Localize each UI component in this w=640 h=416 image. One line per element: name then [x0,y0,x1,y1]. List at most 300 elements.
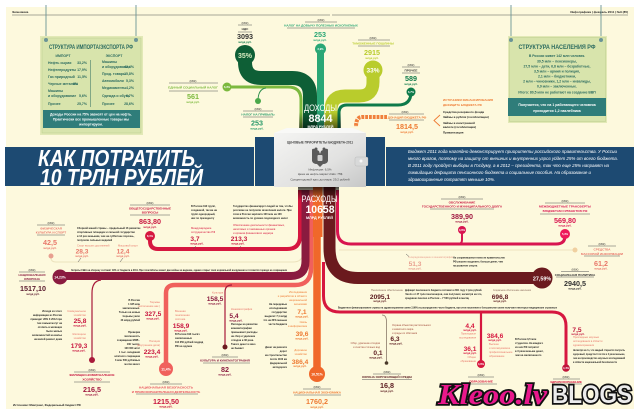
security notes: 1 тыс. заседания [119,351,141,354]
label: culture and cinema: (КБК) [222,353,229,357]
healthcare notes [571,327,625,364]
economy notes: на строительство [265,354,287,357]
label: mineral extraction tax: НАЛОГ НА ДОБЫЧУ ПОЛЕЗНЫХ ИСКОПАЕМЫХ [284,24,359,28]
label: national economy: млрд руб. [310,405,324,409]
revenue total: 8844 [308,113,333,125]
sport sub-items: 28,3 [76,248,89,256]
security notes: пенсионная [175,314,190,317]
education notes: образование [460,359,477,363]
label: unified social tax: ЕДИНЫЙ СОЦИАЛЬНЫЙ НАЛОГ [168,86,218,90]
revenue circles: 2,9% [318,47,324,51]
import list: 17,9% [77,68,88,72]
housing sector notes: млрд руб. [73,324,87,328]
environment notes: 0,1 [373,350,383,357]
label: physical culture and sport: КУЛЬТУРА И СПОРТ [36,230,66,234]
icon: orange chevron [434,115,440,126]
environment notes: и очистка сточных вод [353,346,380,349]
culture notes: млрд руб. [229,318,243,322]
label: physical culture and sport: (КБК) [48,221,55,225]
environment notes: млрд руб. [389,342,403,346]
label: environmental protection: млрд руб. [380,389,394,393]
population text: 0,9 млн – заключенные. [537,84,577,88]
label: housing and utilities: ЖИЛИЩНО-КОММУНАЛЬНОЕ [68,373,115,377]
label: VAT: 3093 [237,32,253,41]
economy notes: На передовые [269,303,288,306]
culture notes: на сбор и удаление [231,335,256,338]
education notes: В России 3,5 млн [515,338,537,341]
note: financial bodies: этом в России зарплата 100 млн на 100 [233,213,282,216]
education notes: из них РФ потратит [515,346,540,349]
watermark: Kleoo.lv [437,379,548,411]
deficit financing sources: ДЕФИЦИТА БЮДЖЕТА РФ [443,103,482,107]
icon: two-headed eagle [312,148,328,167]
culture notes: отходов в 36 раза. [231,339,254,342]
security notes: 116 350 рублей подряд [175,341,204,344]
export list: и оборудование [102,65,130,69]
note: financial bodies: млрд руб. [231,242,245,246]
culture notes: не бывает [231,347,245,350]
label: customs duties: 2915 [364,48,380,57]
export list: Медикаменты [102,86,126,90]
security notes: 130 тысяч, [127,343,140,346]
note: general issues: них по президенту [191,217,215,220]
education notes: 36,1 [464,346,477,353]
culture notes: 5,4 [229,313,239,320]
export list: 4,2% [126,86,135,90]
healthcare notes: в области национальной безопасности [573,361,617,364]
import list: 33,2% [77,61,88,65]
economy notes: Связь [300,320,308,324]
header [12,10,628,15]
label: other revenue: млрд руб. [404,82,418,86]
social sub-items: среднюю пенсию в России – 7 500 рублей в месяц [405,297,469,300]
watermark [437,379,632,411]
sport sub-items: млрд руб. [116,254,130,258]
deficit financing sources: ИСТОЧНИКИ ФИНАНСИРОВАНИЯ [443,98,493,102]
security notes: млрд руб. [174,328,188,332]
note: financial bodies [231,205,293,249]
security notes: 223,4 [144,349,161,356]
healthcare notes: млрд руб. [571,332,585,336]
label: budget donations: млрд руб. [400,130,414,134]
label: national security: млрд руб. [159,404,173,408]
note: healthcare budget: Бюджетное финансирование страны на здравоохранение занял 2,98% из распределено части бюджета, при этом население в большинстве своем получают некоторые медицинские страховые [338,306,558,310]
environment notes: и животного мира [392,328,414,331]
note: sport: спортивных площадок и сильной государство [77,231,136,234]
export list: Прочее [102,102,115,106]
sources credit: Источники: Минтранс, Федеральный бюджет РФ [13,403,81,407]
social sub-items: 2095,1 [370,294,390,301]
label: national defence: ОБОРОНА [24,277,41,281]
expense circles: 5,3% [562,232,569,236]
housing sector notes: Исходя из этого [42,310,62,313]
culture notes: Такого денег и кино [231,343,256,346]
note: sport: Сборной нашей страны – предельный 16 развитие [77,227,141,230]
label: interbudget transfers: МЕЖБЮДЖЕТНЫЕ ТРАНСФЕРТЫ [539,204,591,208]
culture notes [207,290,258,350]
healthcare notes: здоровый, предстоит почти в 2 раза меньше, [573,353,625,356]
label: national security: 1215,50 [153,397,179,406]
deficit financing sources: валюте (гособлигации) [443,125,476,129]
economy notes: автодороги [273,366,287,369]
environment notes [351,323,431,360]
label: national economy: (КБК) [314,385,321,389]
revenue total: МЛРД РУБЛЕЙ [308,124,334,129]
education notes: млрд руб. [463,351,477,355]
security notes: В России [129,299,140,302]
TV and radio item: РФ решило выделить больше денег, чем [453,260,503,264]
expense total: 10658 [306,204,334,216]
label: debt servicing: ГОСУДАРСТВЕННОГО И МУНИЦИПАЛЬНОГО ДОЛГА [422,204,503,208]
social sub-items: млрд руб. [493,299,507,303]
housing sector notes: было жилых [46,330,63,333]
sport sub-items: Массовый спорт [118,244,139,248]
expense total [302,194,338,220]
label: national security: (КБК) [163,380,170,384]
label: mass media: 61,2 [594,259,608,268]
expense circles: 3,6% [478,362,485,366]
security notes: заключенных [175,337,193,340]
label: mineral extraction tax: млрд руб. [313,38,327,42]
label: education [468,373,497,384]
label: housing and utilities: ХОЗЯЙСТВО [82,378,102,382]
note: sport [77,227,141,242]
label: culture and cinema: 82 [221,365,229,374]
economy notes: и информатика [288,324,307,328]
note: financial bodies: возможность по уровню подоходного налог [233,217,288,220]
label: social policy: млрд руб. [568,286,582,290]
label: debt servicing: млрд руб. [455,220,469,224]
security notes: (исполнение нак.) [138,304,160,308]
label: healthcare: ЗДРАВООХРАНЕНИЕ [550,380,582,384]
panel: import/export structure: СТРУКТУРА ИМПОРТА/ЭКСПОРТА РФ [49,44,134,51]
label: mineral extraction tax: 253 [314,30,326,39]
social sub-items: Социальное обеспечение населения [493,289,532,292]
TV and radio item: млрд руб. [408,266,422,270]
economy notes: 39,6 [296,331,309,338]
housing sector notes: приводит 28% Х 2012 при [30,318,62,321]
note: general issues: сотрудничество РФ [191,230,215,234]
label: debt servicing: (КБК) [459,195,466,199]
panel: import/export structure: ИМПОРТ [55,54,71,58]
education notes: исследования [459,336,477,340]
label: customs duties [352,36,394,60]
economy notes: части бюджета [268,323,288,326]
economy notes: Дорожное [294,348,308,352]
housing sector notes: тем самым могут на [37,322,63,325]
sport sub-items: 12,4 [117,248,130,256]
callout: oil dependence: импортируем. [79,122,103,126]
education notes: образование [489,354,505,358]
economy notes: хозяйство [295,352,308,356]
label: education: ОБРАЗОВАНИЕ [469,380,493,384]
deficit financing sources: Займы в иностранной [443,121,475,125]
economy notes: государство [272,311,287,314]
label: environmental protection: (КБК) [384,370,391,374]
revenue circles [222,44,416,104]
intro text: В 2011 году пройдут выборы в Госдуму, а в 2012 – президента, так что еще 25% направят на [408,162,609,168]
expense circles: 14,23% [54,276,66,280]
import list: Газ природный [48,75,75,79]
security notes: (внутренние дела) [137,343,160,347]
expense total: МЛРД РУБЛЕЙ [306,215,333,220]
label: budget donations [388,110,427,134]
security notes: 43 млрд рублей [120,319,140,322]
TV and radio item: на развитие спорта [453,264,478,268]
label: interbudget transfers [539,199,591,228]
label: national security: И ПРАВООХРАНИТЕЛЬНАЯ ДЕЯТЕЛЬНОСТЬ [132,390,201,394]
economy notes: что на 30% меньше [263,319,288,322]
import list: Нефтепродукты [48,68,76,72]
label: general state issues: 863,80 [139,217,161,226]
wallet: Цена на нефть марки Urals: 75$ [298,172,343,176]
label: general state issues: ОБЩЕГОСУДАРСТВЕННЫЕ [129,206,171,210]
healthcare notes: чем на производство научных исследований [573,357,625,360]
import list: и оборудование [48,94,76,98]
security notes: 327,5 [145,311,162,318]
panel: import/export structure: ЭКСПОРТ [106,54,123,58]
economy notes: Денег на ремонте [265,346,288,349]
label: other revenue [402,63,420,86]
wallet: Инфляция: 6,5% [308,168,332,172]
callout: oil dependence: Доходы России на 75% зависят от цен на нефть. [50,112,132,116]
sport sub-items: Спорт высших достижений [77,244,110,248]
label: debt servicing [422,195,503,224]
label: VAT: НДС [242,27,249,31]
label: debt servicing: 389,90 [451,212,473,221]
label: national security: НАЦИОНАЛЬНАЯ БЕЗОПАСНОСТЬ [139,386,194,390]
export list: Прод. товары [102,72,126,76]
environment notes: Сбор, удаление отходов [351,341,381,345]
label: national security [132,380,201,408]
security notes: заключенных. [122,307,140,310]
economy notes [263,290,309,369]
security notes: Полиция [149,339,161,343]
expense circles: 11,4% [161,368,171,372]
label: housing and utilities: млрд руб. [85,392,99,396]
economy notes: и разработки в области [278,294,307,298]
label: other revenue: ПРОЧЕЕ [405,68,417,72]
social sub-items: млрд руб. [373,299,387,303]
label: VAT: (КБК) [242,21,249,25]
label: culture and cinema: млрд руб. [218,372,232,376]
environment notes: и среды их обитания [392,331,418,335]
education notes: млрд руб. [463,328,477,332]
label: mass media: СРЕДСТВА [594,248,611,252]
note: financial bodies: 213,3 [231,236,248,243]
export list [102,60,135,106]
label: budget donations: ДОНАЦИЯ БЮДЖЕТА РФ [388,116,427,120]
note: general issues: созданной, так же на [191,209,217,212]
note: general issues: млрд руб. [190,242,204,246]
environment notes: Охрана объектов растительного [392,323,431,327]
population text: В России живет 142 млн человек. [529,54,585,58]
education notes: Общее [468,355,477,359]
label: profit tax: (КБК) [255,107,262,111]
social sub-items: Число от 27 трлн пенсионеров, они получают, несмотря на это, [405,293,482,296]
banner band [5,137,634,186]
culture notes: превышают расходы [231,331,257,334]
security notes: 100 000 штат [124,347,141,350]
healthcare notes: Прикладные научные [573,335,600,339]
security notes: В России 193 тысяч [175,333,200,336]
label: culture and cinema: КУЛЬТУРА И КИНЕМАТОГРАФИЯ [200,358,251,362]
housing sector notes: отопить в жилищах [38,326,63,329]
watermark: BLOGS [552,381,632,409]
revenue circles: 33% [366,68,380,74]
label: national defence: млрд руб. [26,292,40,296]
culture notes: Культура [212,290,224,294]
note: general issues: Международное [191,226,212,230]
housing sector notes: возможностей на жилье [32,334,63,337]
security notes: сокращение МОБ - [117,339,140,342]
economy notes: млрд руб. [295,336,309,340]
security notes: 1 325 млн [128,303,140,306]
callout: dependants: Получается, что на 1 работающего человека [518,103,596,107]
expense circles: 8,1% [147,234,154,238]
education notes: студентов. На каждого [515,342,544,345]
label: profit tax: НАЛОГ НА ПРИБЫЛЬ [241,112,275,116]
culture notes: Кинематография [231,307,253,311]
label: budget donations: 1814,5 [396,122,418,131]
label: general state issues: млрд руб. [143,225,157,229]
header: Инфографика | февраль 2011 | №9 (85) [570,10,628,14]
note: general issues: 3,7 [190,236,200,243]
export list: Автомобили [102,79,124,83]
label: other revenue: (КБК) [408,63,415,67]
housing sector notes: 25,8 [74,318,87,325]
label: interbudget transfers: 569,80 [554,216,576,225]
label: social policy [555,268,596,290]
population text: 27,5 млн – дети, 6,8 млн – безработные, [524,64,591,68]
note: financial bodies: Государство финансирует людей за том, чтобы [233,205,293,208]
label: environmental protection: 16,8 [380,381,394,390]
label: general state issues [129,201,171,229]
housing sector notes: млрд руб. [72,348,86,352]
label: national defence: НАЦИОНАЛЬНАЯ [19,273,46,277]
label: housing and utilities: (КБК) [89,368,96,372]
environment notes: 6,3 [390,336,400,343]
label: physical culture and sport: ФИЗИЧЕСКАЯ [40,226,63,230]
label: mineral extraction tax: (КБК) [318,18,325,22]
label: national defence [19,268,46,296]
housing sector notes: 179,3 [71,343,88,350]
security notes: млрд руб. [146,316,160,320]
label: unified social tax: 561 [187,92,199,101]
callout: oil dependence: Практически все промышленные товары мы [53,118,129,122]
culture notes: Расходы на развитие [231,323,258,326]
import list [48,61,88,106]
note: financial bodies: и органов финансового надзора [233,231,274,235]
education notes: млрд руб. [488,338,502,342]
security notes: Проверка [128,331,141,334]
export list: Машины [102,60,117,64]
housing sector notes: Коммунальное [67,309,86,313]
revenue total: ДОХОДЫ [304,103,337,113]
revenue circles: 35% [238,53,253,60]
revenue total [304,103,337,129]
sport sub-items: млрд руб. [75,254,89,258]
note: financial bodies: Обеспечение деятельности финансовых, [233,223,285,227]
TV and radio item: Телерадиовещание и кинематография [408,256,454,259]
security notes: Тюрьмы [150,300,160,304]
note: general issues: групп однородный, [191,213,216,216]
label: interbudget transfers: БЮДЖЕТАМ СУБЪЕКТОВ РФ [543,209,588,213]
culture notes: 158,5 [207,296,224,303]
panel: population structure [508,36,607,123]
social sub-items [370,289,532,303]
label: VAT: млрд руб. [238,40,252,44]
education notes: 384,6 [487,333,504,340]
note: general issues: В России 190 групп, [191,205,216,208]
education notes: чем на заключенного [515,354,542,357]
education notes: в 3 раза меньше денег, [515,350,544,353]
population text: 39,5 млн – пенсионеры, [537,60,577,64]
population text: 2 млн – чиновники, 1,2 млн – инвалиды, [523,80,591,84]
label: customs duties: млрд руб. [365,56,379,60]
label: unified social tax [168,79,218,104]
label: mass media [581,242,624,270]
security notes: РФ на оружие [175,345,193,348]
expense circles: 4,4% [563,366,570,370]
label: customs duties: ТАМОЖЕННЫЕ ПОШЛИНЫ [352,42,394,46]
economy notes: 7,1 [297,309,307,316]
economy notes: почти 1100 км [270,358,287,361]
export list: Одежда и обувь [102,94,130,98]
title: КАК ПОТРАТИТЬ [38,145,195,171]
label: national economy: 1760,2 [306,397,328,406]
deficit financing sources [443,98,493,134]
label: mass media: млрд руб. [594,266,608,270]
revenue circles: 6,7% [408,90,415,94]
economy notes: 386,4 [292,359,309,366]
education notes: Прикладные [461,332,477,336]
revenue flows [227,49,411,134]
label: environmental protection [362,370,412,393]
deficit financing sources: Средства резервного фонда [443,110,484,114]
social sub-items: Пенсионное обеспечение [371,289,404,292]
security notes: тюрьмы ушло [122,315,140,318]
expense total: РАСХОДЫ [302,194,338,204]
healthcare notes: исследования в области [573,339,603,343]
population text: Итого: 80,5 млн не работают на создание ВВП [518,90,596,94]
label: other revenue: 589 [405,74,417,83]
housing sector notes: информации из России [33,314,62,317]
revenue circles: 6,3% [224,85,231,89]
label: housing and utilities: 216,5 [83,385,101,394]
label: general state issues: ВОПРОСЫ [142,210,158,214]
import list: 11,5% [77,75,88,79]
housing sector notes: на малой ремонт дома [34,338,63,341]
import list: 25,7% [77,102,88,106]
callout: oil dependence [43,110,140,128]
label: profit tax: млрд руб. [250,126,264,130]
note: sport: получили сильных медалей [77,239,113,242]
TV and radio item: На сохранившиеся новости правительство [453,256,505,260]
culture notes: кинематографии [231,327,252,330]
healthcare notes: здравоохранения [573,344,595,347]
label: social policy: СОЦИАЛЬНАЯ ПОЛИТИКА [555,273,596,277]
healthcare notes: 7,5 [572,327,582,334]
security notes [114,299,204,366]
healthcare notes: Несмотря на то, что каждый старается получить [573,349,625,352]
TV and radio item [406,254,505,270]
label: housing and utilities [68,368,115,396]
label: interbudget transfers: млрд руб. [558,224,572,228]
environment notes: млрд руб. [369,356,383,360]
label: national economy: НАЦИОНАЛЬНАЯ ЭКОНОМИКА [293,390,342,394]
label: physical culture and sport: млрд руб. [43,246,57,250]
